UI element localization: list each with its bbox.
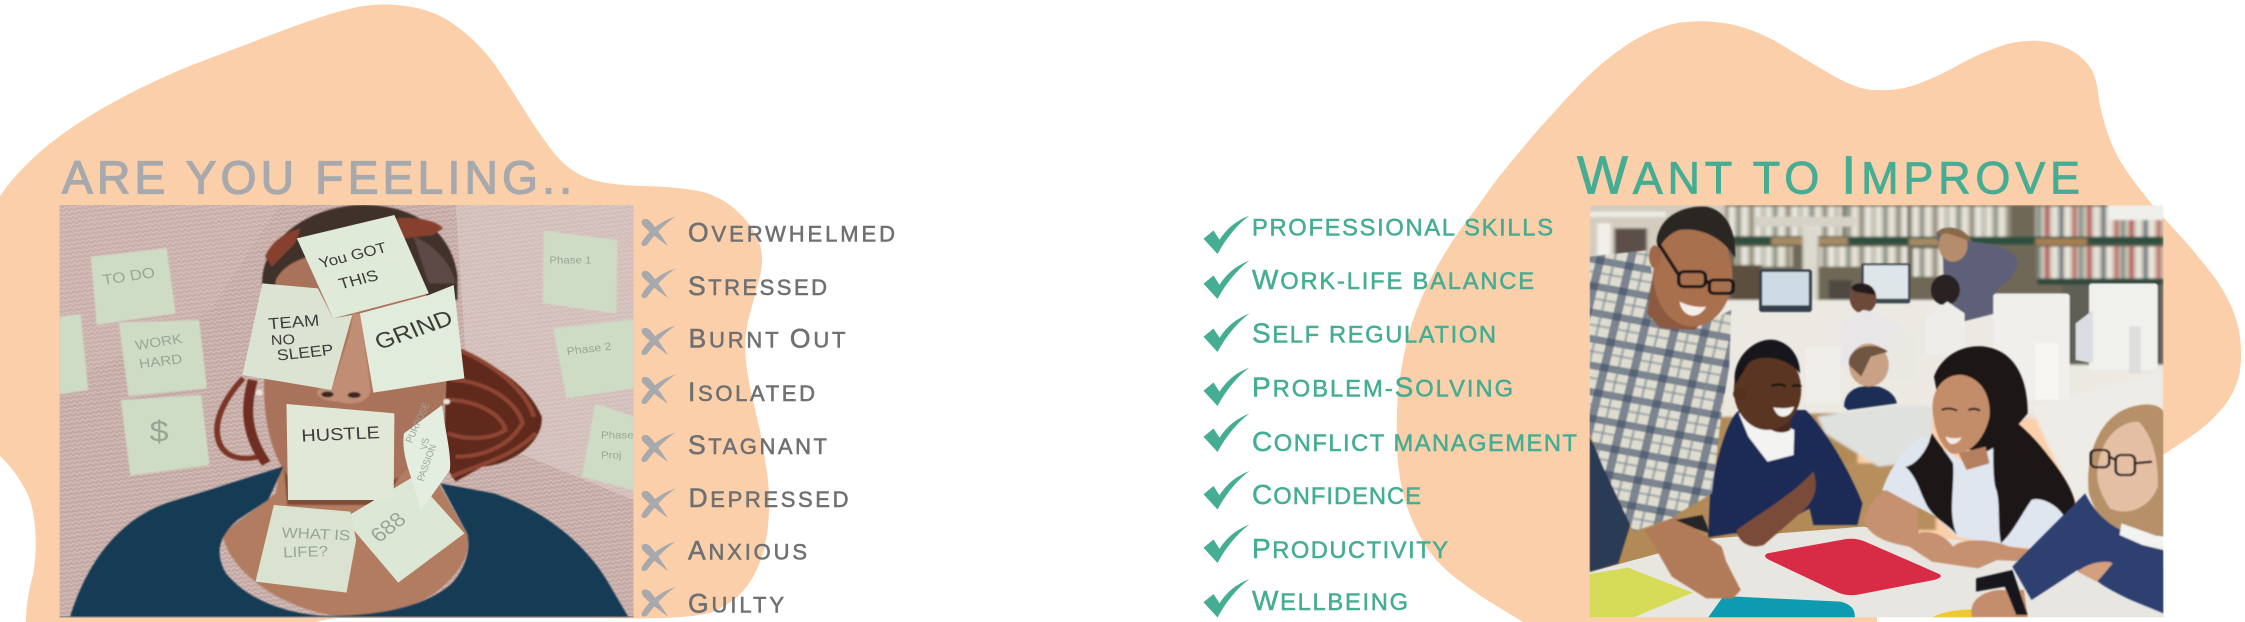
item: self regulation: SELF REGULATION bbox=[1252, 318, 1496, 349]
blurred note writing: Proj bbox=[601, 450, 621, 461]
note: purpose vs passion: PURPOSE bbox=[404, 401, 432, 444]
item: overwhelmed: OVERWHELMED bbox=[688, 218, 895, 248]
item: guilty bbox=[641, 587, 784, 619]
blurred note writing: Phase 2 bbox=[566, 341, 612, 358]
teacher hand and arm bbox=[1645, 517, 1741, 598]
item: confidence: CONFIDENCE bbox=[1252, 479, 1421, 510]
item: stagnant: STAGNANT bbox=[688, 430, 827, 460]
blurred note writing: Phase bbox=[601, 430, 634, 441]
table top bbox=[1590, 527, 2164, 617]
sharp sticky notes bbox=[242, 215, 464, 593]
list: feelings with cross icons bbox=[641, 216, 895, 619]
teacher head bbox=[1653, 223, 1732, 327]
item: conflict management: CONFLICT MANAGEMENT bbox=[1252, 426, 1577, 457]
blanket background bbox=[60, 205, 634, 617]
item: wellbeing bbox=[1204, 579, 1408, 618]
mat: red bbox=[1765, 539, 1941, 595]
item: depressed: DEPRESSED bbox=[688, 483, 848, 513]
item: guilty: GUILTY bbox=[688, 589, 784, 619]
teacher jeans bbox=[1590, 437, 1630, 572]
item: conflict management bbox=[1204, 414, 1577, 457]
note: team no sleep bbox=[242, 283, 352, 390]
item: burnt out: BURNT OUT bbox=[688, 324, 846, 354]
photo: teacher and students in a library bbox=[1590, 205, 2164, 618]
blurred monitors and people bbox=[1759, 228, 2158, 410]
note: team no sleep: SLEEP bbox=[276, 342, 335, 364]
blurred note writing bbox=[101, 255, 634, 461]
item: stressed bbox=[641, 268, 827, 301]
blurred note writing: $ bbox=[149, 415, 169, 448]
item: problem-solving bbox=[1204, 368, 1513, 406]
mat: teal bbox=[1708, 596, 1855, 617]
note: grind bbox=[360, 285, 464, 393]
blurred background sticky notes bbox=[60, 231, 634, 490]
blurred note writing: Phase 1 bbox=[549, 255, 591, 266]
item: work-life balance bbox=[1204, 260, 1534, 299]
note: you got this: You GOT bbox=[317, 240, 389, 272]
note: purpose vs passion bbox=[403, 401, 450, 512]
mat: yellow bbox=[1932, 609, 1974, 617]
item: depressed bbox=[641, 483, 848, 518]
blurred library background bbox=[1590, 205, 2164, 570]
note: team no sleep: NO bbox=[270, 332, 295, 349]
heading: are you feeling: ARE YOU FEELING.. bbox=[62, 152, 572, 204]
item: anxious: ANXIOUS bbox=[688, 536, 807, 566]
blurred note writing: HARD bbox=[138, 352, 183, 372]
note: grind: GRIND bbox=[371, 306, 457, 355]
item: confidence bbox=[1204, 471, 1421, 510]
panel: right peach blob bbox=[1397, 21, 2241, 622]
note: you got this: THIS bbox=[337, 267, 381, 293]
item: anxious bbox=[641, 536, 807, 571]
mat: yellow green bbox=[1590, 568, 1693, 617]
student: blonde girl with glasses bbox=[1971, 404, 2164, 617]
teacher in plaid shirt bbox=[1590, 207, 1741, 598]
item: stressed: STRESSED bbox=[688, 271, 827, 301]
item: professional skills bbox=[1204, 216, 1553, 254]
item: productivity: PRODUCTIVITY bbox=[1252, 533, 1448, 564]
note: purpose vs passion: VS bbox=[419, 437, 431, 450]
item: problem-solving: PROBLEM-SOLVING bbox=[1252, 372, 1513, 403]
item: isolated: ISOLATED bbox=[688, 377, 815, 407]
note: hustle: HUSTLE bbox=[301, 422, 380, 445]
woman: face and neck bbox=[222, 253, 469, 617]
blurred note writing: WORK bbox=[134, 332, 184, 354]
note: what is life: LIFE? bbox=[283, 544, 329, 561]
note: 688 bbox=[344, 477, 464, 583]
note: you got this bbox=[297, 215, 429, 318]
panel: left peach blob bbox=[0, 4, 769, 622]
student: boy in navy sweater bbox=[1708, 340, 1862, 546]
blurred note writing: TO DO bbox=[101, 265, 156, 289]
woman: navy top bbox=[70, 467, 629, 617]
note: purpose vs passion: PASSION bbox=[415, 443, 439, 482]
item: self regulation bbox=[1204, 314, 1496, 352]
note: team no sleep: TEAM bbox=[267, 311, 320, 333]
heading: want to improve: WANT TO IMPROVE bbox=[1577, 146, 2080, 206]
item: wellbeing: WELLBEING bbox=[1252, 585, 1408, 616]
item: professional skills: PROFESSIONAL SKILLS bbox=[1252, 216, 1553, 242]
note: what is life: WHAT IS bbox=[281, 525, 351, 544]
photo: woman covered in sticky notes bbox=[60, 205, 634, 618]
teacher shirt bbox=[1590, 250, 1731, 532]
item: isolated bbox=[641, 374, 815, 407]
list: improvements with check icons bbox=[1204, 216, 1577, 618]
item: productivity bbox=[1204, 524, 1448, 564]
item: work-life balance: WORK-LIFE BALANCE bbox=[1252, 264, 1534, 295]
note: 688: 688 bbox=[366, 508, 411, 547]
student: girl in white shirt bbox=[1863, 346, 2076, 568]
coloured table mats bbox=[1590, 539, 1974, 617]
note: hustle bbox=[286, 404, 394, 500]
woman: hair and braids bbox=[217, 205, 542, 482]
note: what is life bbox=[255, 505, 356, 593]
